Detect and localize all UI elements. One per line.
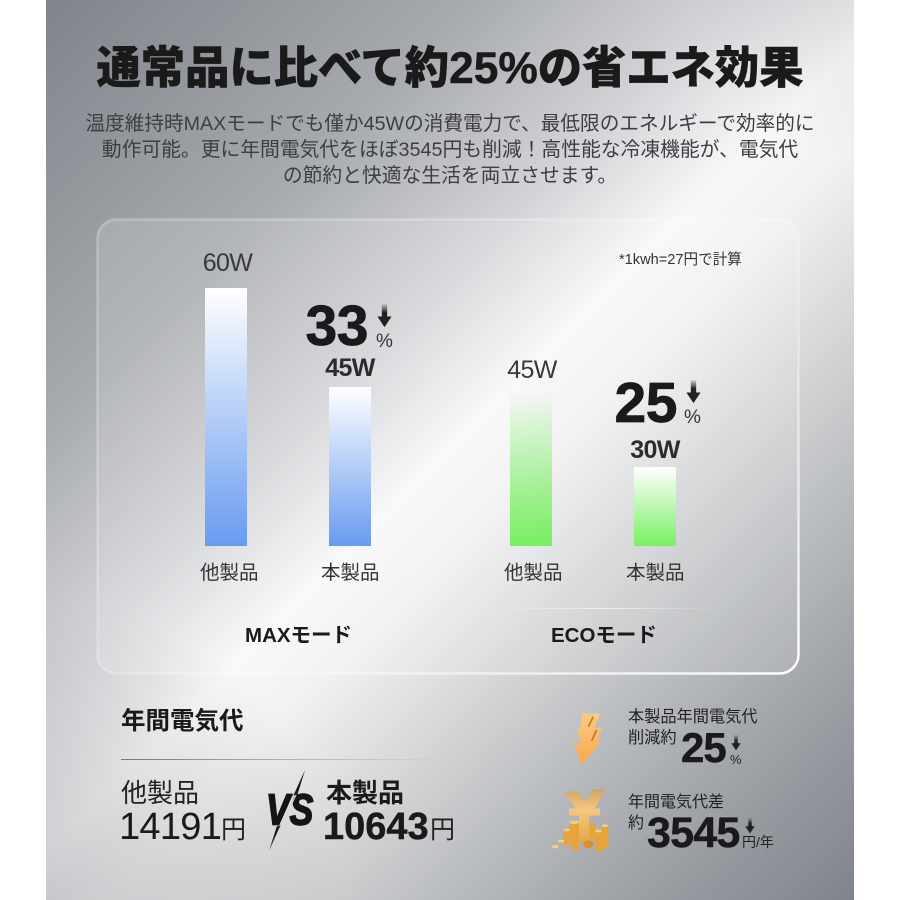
bar chart: ECO mode: [504, 356, 685, 584]
description text: の節約と快適な生活を両立させます。: [283, 164, 617, 186]
label: 本製品年間電気代: [628, 708, 758, 726]
icon: down arrow: [731, 735, 741, 750]
unit: 円/年: [742, 834, 774, 850]
price difference block: [628, 793, 774, 857]
icon: down arrow: [745, 818, 755, 834]
annual electricity heading: 年間電気代: [121, 708, 244, 735]
ECO mode label: ECOモード: [551, 624, 657, 647]
label: 他製品: [121, 778, 199, 808]
label: this product: 本製品: [321, 562, 380, 584]
description text: [85, 112, 815, 186]
label: 年間電気代差: [628, 794, 724, 811]
MAX mode label: MAXモード: [245, 624, 352, 647]
callout: 25% reduction: [614, 371, 701, 464]
unit: 円: [430, 816, 455, 844]
label: other product: 他製品: [200, 562, 259, 584]
label: 本製品: [326, 778, 404, 808]
footnote: *1kwh=27円で計算: [619, 252, 742, 268]
number 33: 33: [306, 294, 368, 358]
bar: this product 30W: [634, 467, 676, 546]
amount: 10643: [323, 806, 429, 848]
callout: 33% reduction: [306, 294, 393, 382]
this product cost: [323, 778, 455, 848]
label 45W: 45W: [325, 354, 375, 382]
title: 通常品に比べて約25%の省エネ効果: [96, 44, 804, 93]
label 30W: 30W: [630, 436, 680, 464]
bar: this product 45W: [329, 387, 371, 546]
label: other product: 他製品: [504, 562, 563, 584]
percent sign: %: [376, 331, 393, 352]
number 25: 25: [681, 724, 726, 771]
label: 削減約: [628, 729, 677, 747]
chart panel: [96, 218, 800, 675]
icon: VS mark: [266, 770, 314, 850]
percent: %: [730, 752, 742, 767]
label: this product: 本製品: [626, 562, 685, 584]
icon: lightning bolt: [574, 713, 602, 764]
description text: 温度維持時MAXモードでも僅か45Wの消費電力で、最低限のエネルギーで効率的に: [85, 112, 815, 134]
icon: down arrow: [377, 304, 392, 327]
label: 60W: 60W: [203, 249, 252, 277]
description text: 動作可能。更に年間電気代をほぼ3545円も削減！高性能な冷凍機能が、電気代: [102, 138, 798, 160]
other product cost: [119, 778, 246, 848]
label: 45W: 45W: [507, 356, 557, 384]
bar chart: MAX mode: [200, 249, 380, 584]
percent sign: %: [684, 407, 701, 428]
saving rate block: [628, 708, 758, 771]
bar: other product 45W: [510, 389, 552, 546]
amount: 14191: [119, 806, 221, 848]
icon: down arrow: [686, 380, 701, 403]
bar: other product 60W: [205, 288, 247, 546]
icon: yen and coins: [551, 789, 608, 852]
unit: 円: [221, 816, 246, 844]
label: 約: [628, 815, 644, 832]
number 25: 25: [614, 371, 677, 435]
number 3545: 3545: [647, 809, 739, 857]
